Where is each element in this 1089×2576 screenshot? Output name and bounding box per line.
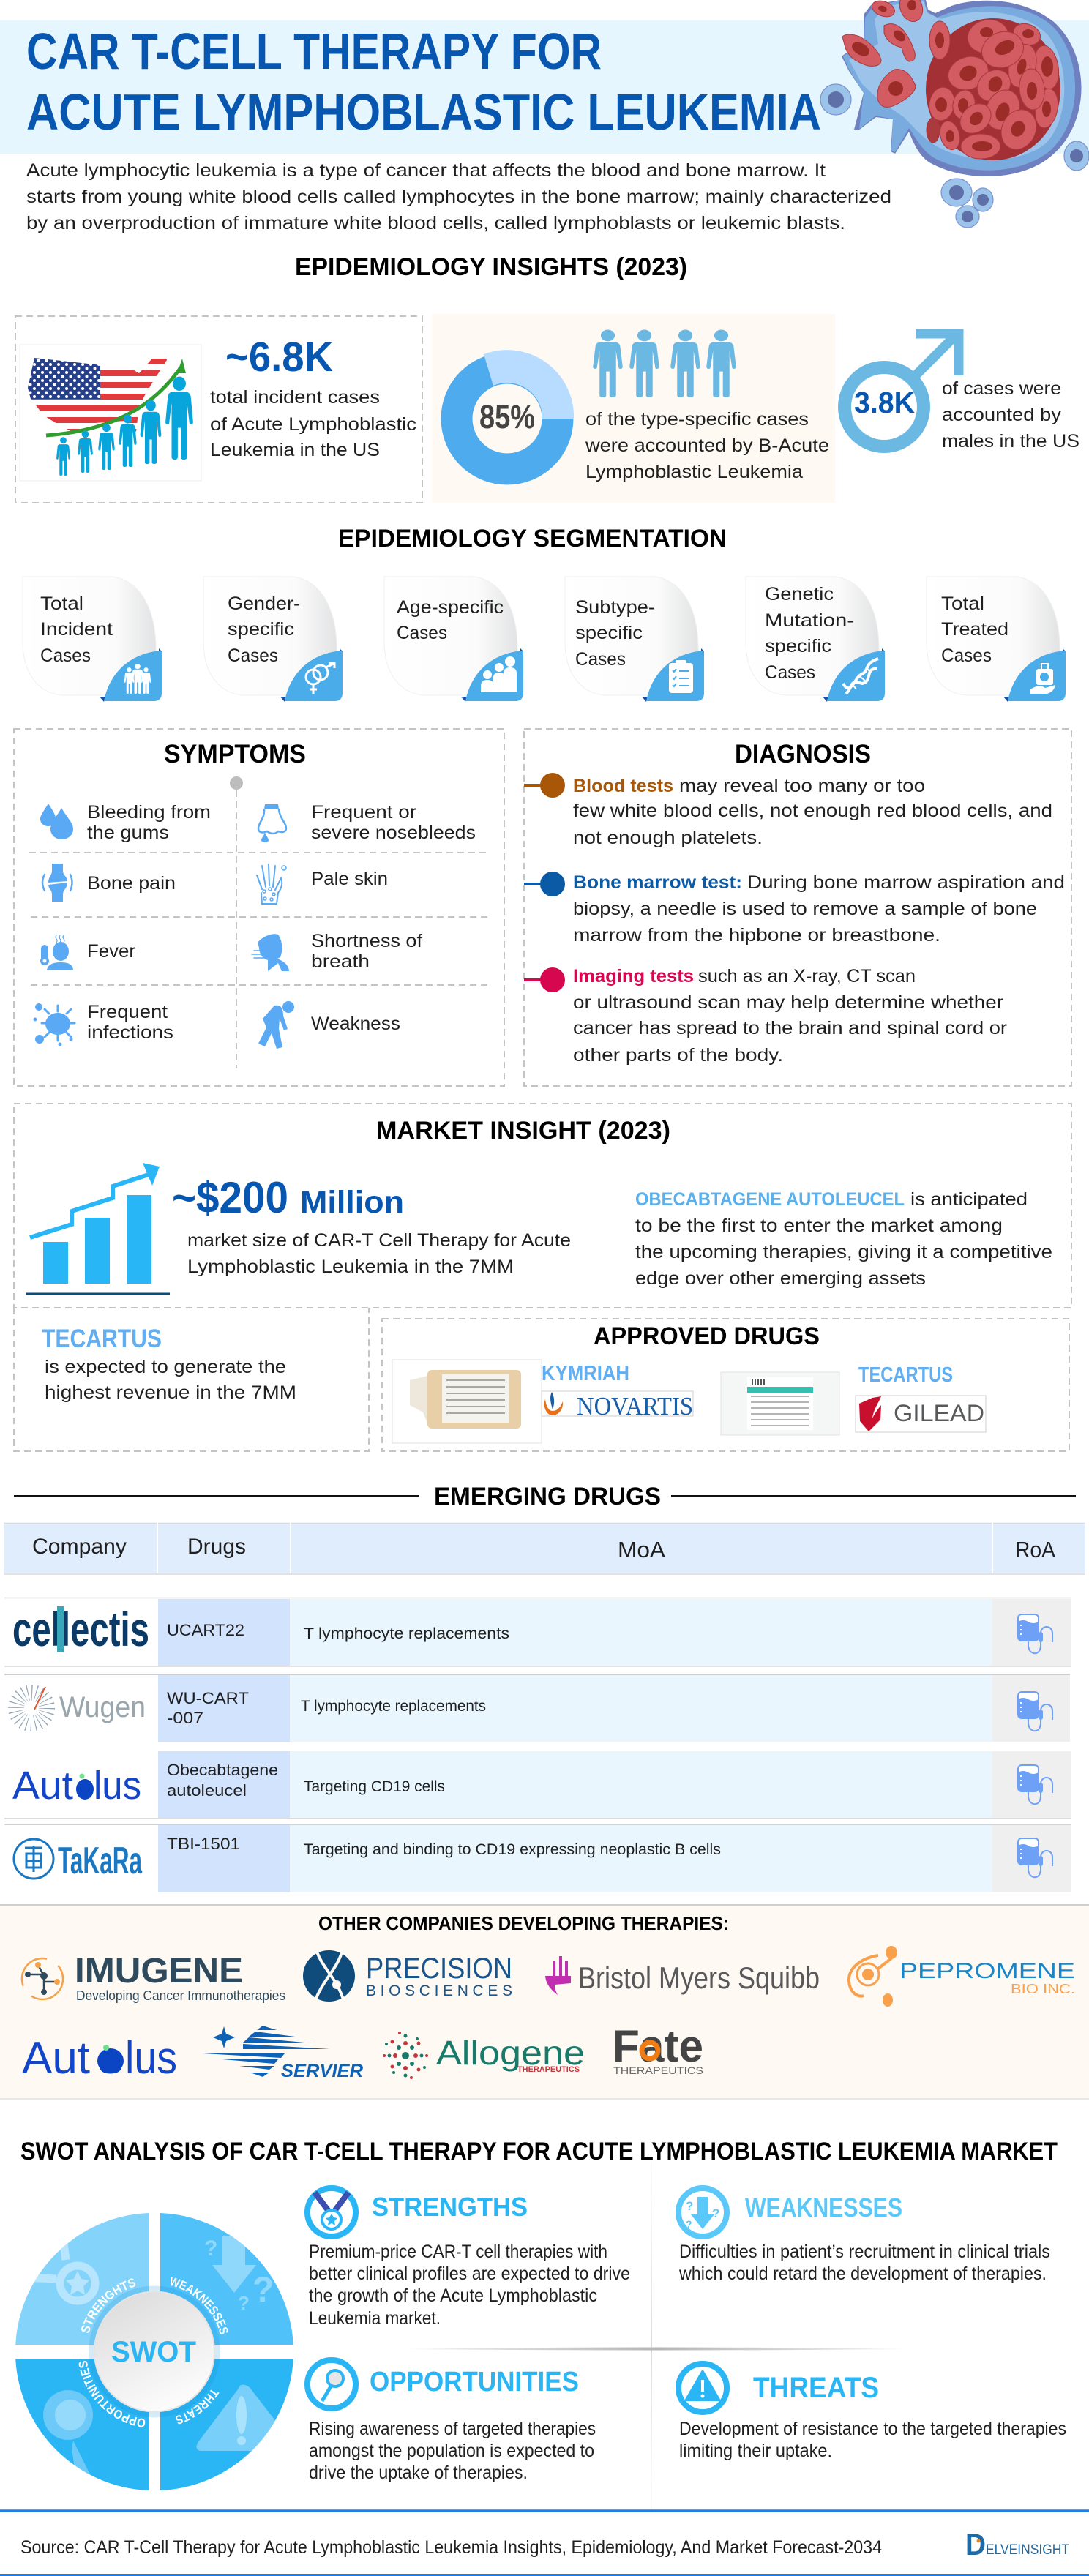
symptom: shortness of breath: Shortness of — [311, 931, 422, 951]
blood tests item: few white blood cells, not enough red blood cells, and — [573, 801, 1052, 821]
swot: weaknesses — [678, 2188, 1050, 2284]
icon: medal — [307, 2188, 356, 2236]
blood tests item: Blood tests — [573, 776, 673, 796]
stat: male cases: males in the US — [942, 431, 1079, 452]
logo: autolus — [12, 1764, 141, 1808]
symptom: shortness of breath — [252, 931, 422, 972]
symptom: shortness of breath: breath — [311, 951, 370, 972]
card: subtype-specific cases — [565, 577, 704, 702]
row: UCART22 — [4, 1598, 1071, 1666]
panel: other companies — [0, 1905, 1089, 2099]
quadrant: weaknesses: WEAKNESSES — [170, 2277, 228, 2334]
icon: down arrow with question marks: ? — [712, 2206, 719, 2220]
icon: down arrow with question marks: ? — [686, 2199, 693, 2213]
row: obecabtagene autoleucel: autoleucel — [167, 1781, 247, 1800]
logo: bristol myers squibb: Bristol Myers Squibb — [578, 1961, 820, 1995]
quadrant: weaknesses: ? — [204, 2236, 217, 2261]
caption: Lymphoblastic Leukemia — [585, 462, 803, 482]
logo: delveinsight: ELVEINSIGHT — [986, 2542, 1069, 2558]
quadrant: opportunities — [15, 2359, 149, 2490]
stat: market size: Million — [300, 1185, 404, 1220]
image: kymriah product — [392, 1360, 542, 1443]
swot: weaknesses: Difficulties in patient’s recruitment in clinical trials — [679, 2242, 1050, 2262]
logo: autolus: Aut — [22, 2033, 90, 2083]
swot: strengths: better clinical profiles are expected to drive — [309, 2264, 630, 2284]
caption — [585, 409, 829, 482]
caption: were accounted by B-Acute — [585, 435, 829, 456]
logo: autolus: lus — [94, 1764, 141, 1808]
imaging tests item: Imaging tests — [573, 966, 694, 986]
swot: strengths: Leukemia market. — [309, 2308, 441, 2329]
card: total treated cases: Treated — [941, 619, 1008, 640]
swot: strengths: the growth of the Acute Lymphoblastic — [309, 2285, 597, 2306]
icon: rising bar chart — [26, 1163, 170, 1294]
icon: four people — [593, 329, 736, 397]
stat: male cases: of cases were — [942, 378, 1061, 399]
panel: diagnosis — [524, 729, 1071, 1086]
intro paragraph: by an overproduction of immature white blood cells, called lymphoblasts or leukemic blasts. — [26, 213, 845, 233]
logo: autolus: o — [97, 2048, 124, 2080]
card: genetic mutation-specific cases: Mutation- — [765, 610, 854, 631]
panel: tecartus revenue: is expected to generate the — [45, 1357, 286, 1377]
swot: strengths: STRENGTHS — [372, 2192, 528, 2222]
quadrant: threats — [160, 2359, 293, 2490]
card: age-specific cases — [384, 577, 523, 702]
obecabtagene note: edge over other emerging assets — [635, 1268, 926, 1289]
symptom: frequent infections: infections — [87, 1022, 173, 1043]
swot: opportunities: amongst the population is expected to — [309, 2441, 594, 2461]
panel: incident cases — [15, 316, 422, 503]
logo: imugene — [22, 1952, 285, 2003]
table header row: Drugs — [187, 1535, 246, 1559]
stat caption: Lymphoblastic Leukemia in the 7MM — [187, 1257, 514, 1277]
card: subtype-specific cases: Subtype- — [575, 597, 655, 618]
label: tecartus: TECARTUS — [858, 1363, 953, 1387]
icon: down arrow with question marks: ? — [686, 2218, 692, 2230]
row: UCART22: T lymphocyte replacements — [304, 1625, 509, 1642]
logo: allogene — [383, 2032, 585, 2079]
table header row: MoA — [618, 1537, 665, 1562]
table header row — [4, 1522, 1085, 1574]
obecabtagene note: is anticipated — [910, 1189, 1028, 1210]
panel: type-specific cases — [432, 314, 835, 503]
swot: strengths — [307, 2188, 630, 2329]
quadrant: threats: THREATS — [176, 2390, 220, 2424]
icon: male symbol — [845, 334, 959, 446]
logo: servier — [203, 2026, 363, 2081]
logo: takara: TaKaRa — [58, 1840, 143, 1882]
logo: bristol myers squibb — [545, 1956, 820, 1995]
card: gender-specific cases: Cases — [228, 645, 278, 666]
label: kymriah: KYMRIAH — [542, 1362, 629, 1385]
symptom: nosebleeds — [258, 802, 476, 843]
symptom: frequent infections: Frequent — [87, 1002, 168, 1022]
panel: approved drugs — [382, 1319, 1069, 1451]
symptom: bleeding from the gums: the gums — [87, 823, 169, 843]
obecabtagene note — [635, 1189, 1052, 1289]
card: total treated cases: Cases — [941, 645, 992, 666]
obecabtagene note: OBECABTAGENE AUTOLEUCEL — [635, 1189, 905, 1210]
logo: imugene: Developing Cancer Immunotherapies — [76, 1988, 285, 2003]
card: subtype-specific cases: specific — [575, 623, 643, 643]
swot: strengths: Premium-price CAR-T cell therapies with — [309, 2242, 607, 2262]
swot: threats: Development of resistance to the targeted therapies — [679, 2419, 1066, 2439]
card: gender-specific cases: Gender- — [228, 594, 300, 614]
footer — [0, 2511, 1089, 2575]
icon: leukemia cell illustration — [820, 0, 1089, 228]
header band — [0, 20, 1089, 154]
logo: autolus: Aut — [12, 1764, 73, 1808]
logo: delveinsight: D — [965, 2527, 986, 2561]
swot: weaknesses: WEAKNESSES — [745, 2193, 902, 2223]
blood tests item: not enough platelets. — [573, 828, 763, 848]
title: ACUTE LYMPHOBLASTIC LEUKEMIA — [26, 83, 821, 141]
symptom: bleeding from the gums — [40, 802, 211, 843]
logo: takara — [14, 1839, 143, 1882]
row: obecabtagene autoleucel: Obecabtagene — [167, 1761, 278, 1779]
obecabtagene note: to be the first to enter the market among — [635, 1216, 1003, 1236]
blood tests item — [524, 773, 1052, 848]
logo: pepromene bio — [849, 1946, 1075, 2007]
bone marrow test item: Bone marrow test: — [573, 872, 742, 893]
stat: market size — [172, 1173, 404, 1222]
swot cross divider — [404, 2161, 910, 2509]
symptom: weakness — [258, 1001, 400, 1049]
icon: down arrow with question marks — [678, 2188, 727, 2236]
row: TBI-1501: TBI-1501 — [167, 1835, 240, 1853]
panel: symptoms — [14, 729, 504, 1086]
imaging tests item: cancer has spread to the brain and spinal cord or — [573, 1018, 1007, 1038]
logo: wugen — [16, 1687, 146, 1723]
logo: imugene: IMUGENE — [75, 1952, 243, 1991]
panel: tecartus revenue: TECARTUS — [42, 1325, 162, 1353]
swot: threats: THREATS — [753, 2372, 879, 2404]
row: UCART22: UCART22 — [167, 1621, 244, 1639]
logo: pepromene bio: PEPROMENE — [899, 1959, 1075, 1983]
stat caption — [187, 1230, 571, 1277]
imaging tests item — [524, 966, 1007, 1066]
card: genetic mutation-specific cases — [746, 577, 885, 702]
row: WU-CART-007: WU-CART — [167, 1689, 249, 1707]
heading: epidemiology insights: EPIDEMIOLOGY INSIGHTS (2023) — [295, 253, 687, 281]
stat caption: market size of CAR-T Cell Therapy for Acute — [187, 1230, 571, 1251]
imaging tests item: or ultrasound scan may help determine whether — [573, 992, 1003, 1013]
row: obecabtagene autoleucel: Targeting CD19 cells — [304, 1778, 445, 1795]
title: CAR T-CELL THERAPY FOR — [26, 23, 602, 80]
image: tecartus product — [721, 1372, 839, 1435]
quadrant: weaknesses: ? — [238, 2292, 250, 2314]
table: emerging drugs — [4, 1522, 1085, 1892]
icon: US flag map with growing population — [28, 358, 193, 476]
swot: opportunities: Rising awareness of targeted therapies — [309, 2419, 596, 2439]
card: total treated cases: Total — [941, 594, 984, 614]
card: gender-specific cases: specific — [228, 619, 294, 640]
panel: tecartus revenue — [14, 1308, 369, 1451]
card: total incident cases: Incident — [40, 619, 113, 640]
row: WU-CART-007: T lymphocyte replacements — [301, 1698, 486, 1715]
logo: allogene: Allogene — [436, 2034, 585, 2072]
card: gender-specific cases — [203, 577, 343, 702]
blood tests item: may reveal too many or too — [679, 776, 925, 796]
stat: male cases: 3.8K — [854, 386, 915, 419]
imaging tests item: other parts of the body. — [573, 1045, 783, 1066]
swot: opportunities — [307, 2360, 596, 2483]
bone marrow test item: biopsy, a needle is used to remove a sample of bone — [573, 899, 1037, 919]
symptom: frequent infections — [34, 1002, 173, 1046]
panel: tecartus revenue: highest revenue in the 7MM — [45, 1382, 296, 1403]
heading: diagnosis: DIAGNOSIS — [735, 740, 871, 768]
intro paragraph — [26, 160, 891, 233]
swot: opportunities: OPPORTUNITIES — [370, 2367, 579, 2397]
symptom: nosebleeds: severe nosebleeds — [311, 823, 476, 843]
logo: fate therapeutics: Fate — [613, 2021, 703, 2072]
swot: opportunities: drive the uptake of therapies. — [309, 2463, 528, 2483]
panel: market insight — [14, 1104, 1071, 1308]
swot centre disc: SWOT — [111, 2336, 196, 2368]
stat caption — [210, 387, 416, 460]
card: total incident cases: Cases — [40, 645, 91, 666]
logo: precision biosciences: BIOSCIENCES — [366, 1982, 512, 1999]
logo: precision biosciences — [303, 1950, 512, 2002]
logo: novartis: NOVARTIS — [577, 1392, 693, 1420]
card: total incident cases: Total — [40, 594, 83, 614]
chart: swot wheel — [15, 2213, 293, 2490]
stat caption: of Acute Lymphoblastic — [210, 414, 416, 435]
swot centre disc — [94, 2292, 214, 2412]
stat: 6.8K: ~6.8K — [225, 334, 333, 381]
bone marrow test item — [524, 872, 1065, 946]
bone marrow test item: During bone marrow aspiration and — [747, 872, 1065, 893]
stat: male cases: accounted by — [942, 405, 1062, 425]
heading: symptoms: SYMPTOMS — [164, 740, 306, 768]
card: age-specific cases: Cases — [397, 623, 447, 643]
source line: Source: CAR T-Cell Therapy for Acute Lymphoblastic Leukemia Insights, Epidemiology, And Market Forecast-2034 — [20, 2537, 882, 2558]
stat: market size: ~$200 — [172, 1173, 288, 1222]
donut chart 85% — [457, 350, 574, 469]
logo: gilead: GILEAD — [894, 1400, 984, 1426]
table header row: RoA — [1015, 1537, 1055, 1562]
table header row: Company — [32, 1535, 127, 1559]
row: TBI-1501: Targeting and binding to CD19 expressing neoplastic B cells — [304, 1841, 721, 1858]
logo: fate therapeutics: THERAPEUTICS — [613, 2064, 703, 2076]
intro paragraph: starts from young white blood cells called lymphocytes in the bone marrow; mainly characterized — [26, 187, 891, 207]
logo: autolus: lus — [125, 2033, 177, 2083]
row: WU-CART-007 — [4, 1674, 1070, 1742]
logo: autolus — [22, 2033, 177, 2083]
symptom: pale skin: Pale skin — [311, 869, 388, 889]
swot: threats — [678, 2364, 1066, 2461]
card: total incident cases — [23, 577, 162, 702]
quadrant: opportunities: OPPORTUNITIES — [79, 2361, 145, 2427]
symptom: bleeding from the gums: Bleeding from — [87, 802, 211, 823]
heading: epidemiology segmentation: EPIDEMIOLOGY SEGMENTATION — [338, 525, 727, 553]
bone marrow test item: marrow from the hipbone or breastbone. — [573, 925, 940, 946]
icon: magnifier — [307, 2360, 356, 2408]
logo: autolus: o — [76, 1777, 94, 1805]
symptom: nosebleeds: Frequent or — [311, 802, 416, 823]
quadrant: weaknesses: ? — [252, 2271, 274, 2310]
stat caption: total incident cases — [210, 387, 380, 408]
heading: emerging drugs: EMERGING DRUGS — [434, 1483, 661, 1510]
symptom: bone pain: Bone pain — [87, 873, 176, 894]
logo: delveinsight — [965, 2527, 1069, 2561]
obecabtagene note: the upcoming therapies, giving it a competitive — [635, 1242, 1052, 1262]
symptom: bone pain — [42, 864, 176, 902]
logo: allogene: THERAPEUTICS — [517, 2065, 580, 2074]
card: genetic mutation-specific cases: Genetic — [765, 584, 834, 604]
stat: male cases — [845, 334, 1079, 452]
symptom: fever — [40, 935, 135, 970]
symptom: fever: Fever — [87, 941, 135, 962]
logo: precision biosciences: PRECISION — [366, 1952, 512, 1985]
caption: of the type-specific cases — [585, 409, 809, 430]
stat caption: Leukemia in the US — [210, 440, 380, 460]
imaging tests item: such as an X-ray, CT scan — [698, 966, 916, 986]
logo: wugen: Wugen — [59, 1691, 146, 1723]
row: TBI-1501 — [4, 1824, 1071, 1892]
row: obecabtagene autoleucel — [4, 1751, 1071, 1819]
heading: approved drugs: APPROVED DRUGS — [594, 1322, 820, 1350]
row: WU-CART-007: -007 — [167, 1709, 203, 1727]
card: genetic mutation-specific cases: specific — [765, 636, 831, 656]
symptom: pale skin — [257, 864, 388, 904]
card: total treated cases — [927, 577, 1066, 702]
donut chart 85%: 85% — [479, 398, 535, 435]
swot: weaknesses: which could retard the development of therapies. — [678, 2264, 1047, 2284]
quadrant: weaknesses — [160, 2213, 293, 2345]
quadrant: strengths — [15, 2213, 149, 2345]
logo: servier: SERVIER — [281, 2061, 363, 2081]
heading: market insight: MARKET INSIGHT (2023) — [376, 1117, 670, 1145]
card: age-specific cases: Age-specific — [397, 597, 504, 618]
icon: warning triangle — [678, 2364, 727, 2412]
intro paragraph: Acute lymphocytic leukemia is a type of cancer that affects the blood and bone marrow. It — [26, 160, 826, 181]
symptom: weakness: Weakness — [311, 1014, 400, 1034]
card: genetic mutation-specific cases: Cases — [765, 662, 815, 683]
swot: threats: limiting their uptake. — [679, 2441, 832, 2461]
heading: other companies: OTHER COMPANIES DEVELOPING THERAPIES: — [318, 1912, 729, 1934]
logo: pepromene bio: BIO INC. — [1011, 1982, 1075, 1996]
card: subtype-specific cases: Cases — [575, 649, 626, 670]
logo: cellectis: cellectis — [12, 1602, 149, 1656]
title — [26, 23, 821, 141]
quadrant: strengths: STRENGHTS — [81, 2279, 136, 2333]
logo: gilead — [856, 1396, 986, 1432]
